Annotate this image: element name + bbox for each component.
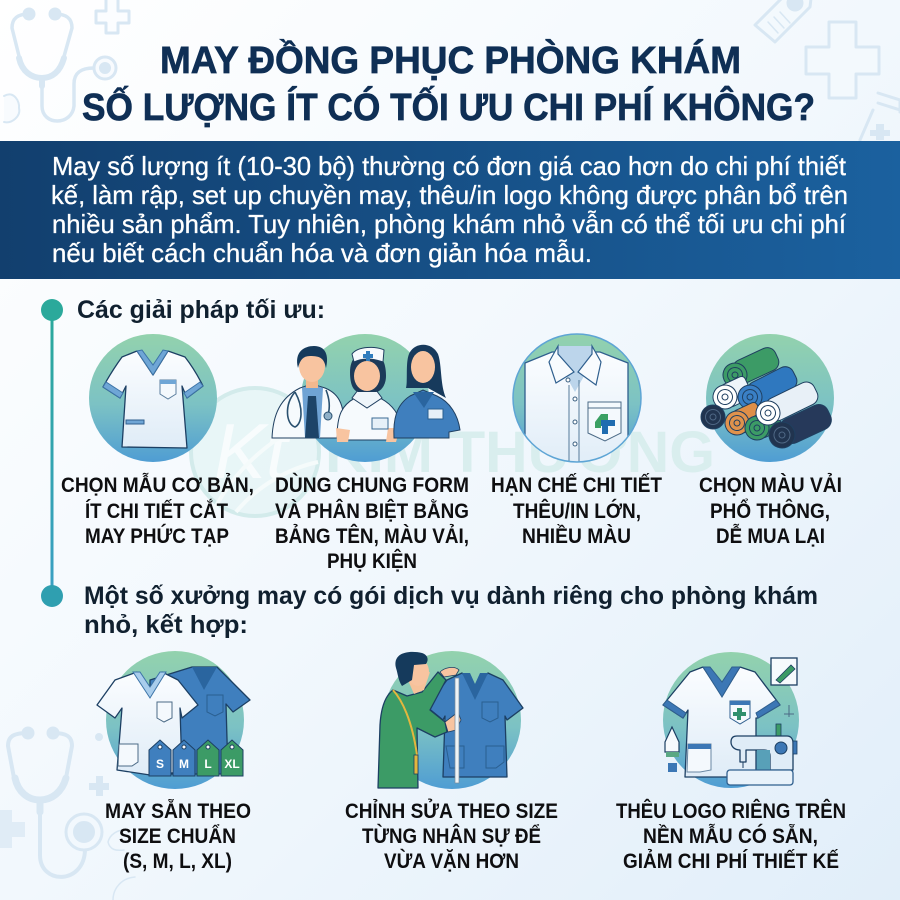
size tags: S: [156, 757, 164, 771]
intro band: nhiều sản phẩm. Tuy nhiên, phòng khám nhỏ vẫn có thể tối ưu chi phí: [52, 209, 847, 239]
watermark logo: [191, 388, 715, 516]
title: SỐ LƯỢNG ÍT CÓ TỐI ƯU CHI PHÍ KHÔNG?: [82, 84, 815, 129]
icon: medical staff: [272, 334, 460, 462]
label 3: THÊU/IN LỚN,: [513, 499, 641, 523]
heading: service packages: [84, 582, 818, 639]
doctor: [272, 346, 345, 438]
staff in blue scrubs: [394, 345, 460, 438]
white roll: [752, 379, 821, 429]
label B: VỪA VẶN HƠN: [384, 849, 519, 873]
small navy roll: [701, 405, 725, 429]
measuring ruler: [455, 678, 459, 783]
label 1: CHỌN MẪU CƠ BẢN,: [61, 474, 254, 497]
orange roll: [721, 401, 766, 439]
icon: tailor adjusting size: [378, 651, 523, 789]
bottom-left stethoscope: [8, 733, 85, 877]
watermark logo: KIM THƯƠNG: [325, 420, 715, 485]
top-right cross: [806, 22, 879, 98]
labels: service packages: [105, 799, 846, 873]
watermark logo: Kt: [214, 407, 291, 495]
label 2: PHỤ KIỆN: [327, 549, 417, 573]
icon: fabric rolls: [701, 334, 835, 462]
icon: basic scrub top: [89, 334, 217, 462]
label A: (S, M, L, XL): [123, 850, 232, 873]
small green roll: [741, 407, 784, 444]
intro band: kế, làm rập, set up chuyền may, thêu/in logo không được phân bổ trên: [51, 180, 848, 210]
top-left stethoscope: [12, 14, 94, 121]
label C: NỀN MẪU CÓ SẴN,: [643, 824, 818, 848]
label 1: MAY PHỨC TẠP: [85, 524, 229, 548]
label 1: [61, 474, 254, 548]
label B: TỪNG NHÂN SỰ ĐỂ: [362, 824, 541, 848]
title: [82, 38, 815, 129]
labels: solutions: [61, 473, 842, 573]
intro band: nếu biết cách chuẩn hóa và đơn giản hóa mẫu.: [52, 238, 592, 268]
label B: CHỈNH SỬA THEO SIZE: [345, 799, 558, 823]
label 3: HẠN CHẾ CHI TIẾT: [491, 474, 662, 497]
sewing machine: [727, 724, 797, 785]
label 3: NHIỀU MÀU: [522, 525, 631, 548]
size tags: L: [204, 757, 212, 771]
blue roll: [734, 364, 800, 413]
label 3: [491, 474, 662, 548]
label B: [345, 799, 558, 873]
large navy roll: [765, 401, 835, 452]
label 4: DỄ MUA LẠI: [716, 525, 825, 548]
pen nib: [665, 727, 679, 772]
label 4: CHỌN MÀU VẢI: [699, 474, 842, 497]
heading: service packages: nhỏ, kết hợp:: [84, 611, 248, 639]
green roll: [719, 345, 782, 391]
scrub on hanger: [427, 673, 523, 777]
intro band: [0, 141, 900, 279]
heading: solutions: Các giải pháp tối ưu:: [77, 296, 325, 324]
intro band: May số lượng ít (10-30 bộ) thường có đơn giá cao hơn do chi phí thiết: [52, 151, 847, 181]
label 2: BẢNG TÊN, MÀU VẢI,: [275, 524, 469, 548]
label A: MAY SẴN THEO: [105, 800, 251, 823]
label 1: ÍT CHI TIẾT CẮT: [85, 499, 228, 523]
label 4: [699, 474, 842, 548]
heading: service packages: Một số xưởng may có gói dịch vụ dành riêng cho phòng khám: [84, 582, 818, 610]
design sheet with pen: [771, 658, 797, 685]
label A: SIZE CHUẨN: [119, 825, 236, 848]
label A: [105, 800, 251, 873]
icon: ready-made sizes: [97, 651, 250, 789]
icon: embroidered logo: [663, 652, 799, 788]
small white roll: [709, 375, 754, 413]
size tags: M: [179, 757, 189, 771]
tailor: [378, 672, 447, 788]
label C: [616, 799, 846, 873]
label C: GIẢM CHI PHÍ THIẾT KẾ: [623, 850, 839, 873]
label C: THÊU LOGO RIÊNG TRÊN: [616, 799, 846, 823]
label 2: DÙNG CHUNG FORM: [275, 473, 469, 497]
title: MAY ĐỒNG PHỤC PHÒNG KHÁM: [160, 38, 741, 82]
top-right jar: [860, 93, 900, 140]
nurse: [336, 347, 402, 442]
size tags: [149, 740, 243, 776]
icon: shirt with small logo pocket: [513, 334, 641, 470]
size tags: XL: [224, 757, 240, 771]
label 2: VÀ PHÂN BIỆT BẰNG: [275, 499, 469, 523]
label 2: [275, 473, 469, 573]
label 4: PHỔ THÔNG,: [710, 499, 830, 523]
timeline connector: [41, 299, 63, 607]
top-right tag: [755, 0, 812, 42]
